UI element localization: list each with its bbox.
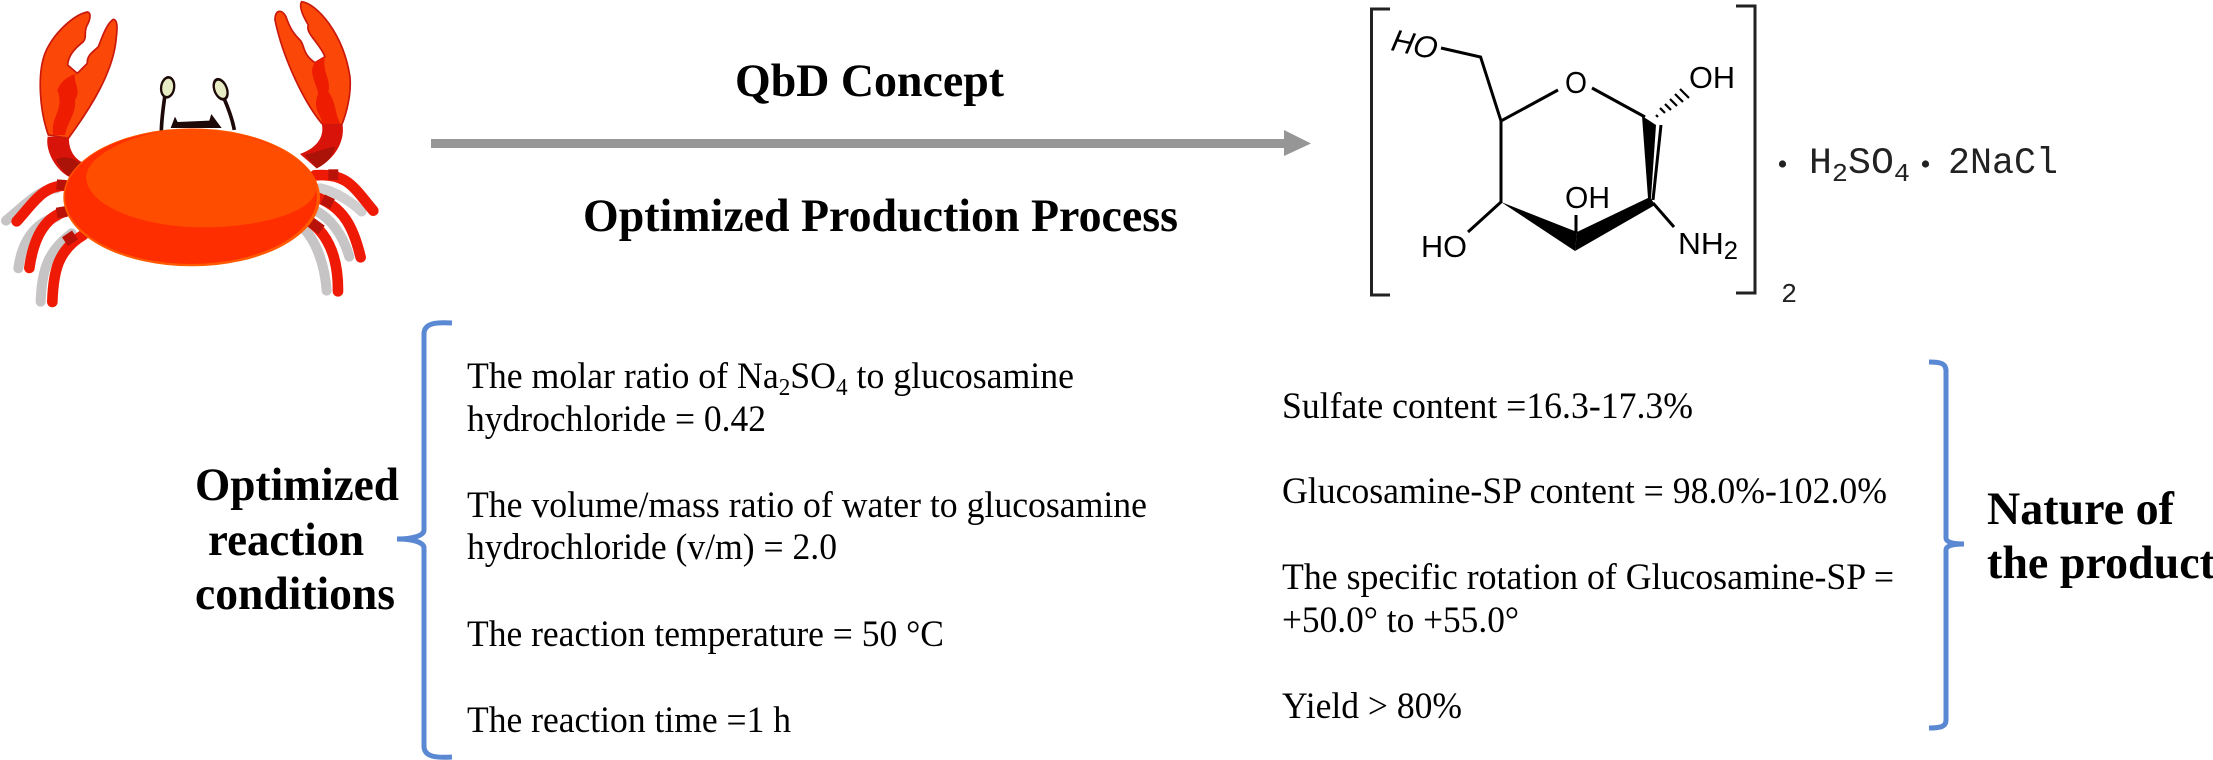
hashed bond (1656, 89, 1689, 117)
crab left claw (40, 12, 117, 138)
crab right eye centre (213, 79, 229, 100)
volume mass ratio value: hydrochloride (v/m) = 2.0 (467, 527, 837, 568)
second dot (1922, 160, 1929, 168)
crab right claw ridge (312, 57, 341, 124)
heading: Optimized Production Process: Optimized Production Process (583, 190, 1178, 242)
crab left claw ridge (53, 74, 78, 135)
formula H2SO4: SO (1848, 143, 1894, 185)
label HO bottom: HO (1421, 229, 1467, 264)
label ring O: O (1565, 65, 1587, 100)
wedge bond bottom left (1501, 202, 1577, 251)
molar ratio: SO (790, 356, 836, 397)
yield: Yield > 80% (1282, 686, 1462, 727)
heading: QbD Concept: QbD Concept (735, 55, 1004, 107)
molar ratio value: hydrochloride = 0.42 (467, 399, 766, 440)
label line conditions: conditions (195, 568, 395, 620)
specific rotation: The specific rotation of Glucosamine-SP = (1282, 557, 1894, 598)
crab right eye (209, 75, 232, 103)
salt formula (1779, 143, 2058, 189)
crab right claw (275, 2, 350, 125)
crab right arm (300, 123, 343, 168)
molar ratio: to glucosamine (848, 356, 1074, 397)
icon: crab (6, 2, 373, 302)
label NH2: NH (1678, 226, 1723, 261)
label line reaction: reaction (208, 514, 364, 566)
left curly bracket (397, 323, 452, 757)
molar ratio: The molar ratio of Na (467, 356, 790, 397)
volume mass ratio: The volume/mass ratio of water to glucosamine (467, 485, 1147, 526)
crab leg shadows (6, 188, 362, 302)
time: The reaction time =1 h (467, 700, 791, 741)
wedge bond right (1642, 116, 1656, 198)
crab leg joints (57, 175, 338, 242)
right curly bracket (1929, 362, 1964, 728)
text block: reaction conditions (467, 356, 1147, 741)
crab body lower shell (65, 129, 317, 264)
left square bracket (1372, 9, 1390, 295)
temperature: The reaction temperature = 50 °C (467, 614, 944, 655)
crab legs (17, 175, 373, 302)
crab mouth (171, 114, 222, 128)
ring bonds (1441, 48, 1674, 233)
crab left arm (47, 137, 85, 177)
first dot (1779, 160, 1786, 168)
wedge bond bottom right (1575, 197, 1655, 251)
formula H2SO4: H (1809, 143, 1831, 185)
label OH top right: OH (1689, 60, 1735, 95)
crab left eye (158, 75, 177, 100)
chemical structure: glucosamine sulfate (1372, 6, 2058, 311)
specific rotation value: +50.0° to +55.0° (1282, 600, 1519, 641)
molar ratio: 4 (836, 375, 848, 401)
label line the product: the product (1987, 537, 2213, 589)
right square bracket (1736, 6, 1755, 293)
formula 2NaCl: 2NaCl (1948, 143, 2058, 185)
heading: Optimized reaction conditions (195, 459, 399, 620)
crab left eye centre (161, 78, 174, 97)
glucosamine content: Glucosamine-SP content = 98.0%-102.0% (1282, 471, 1887, 512)
crab body upper shell (86, 129, 317, 227)
text block: product properties (1282, 386, 1894, 727)
heading: Nature of the product (1987, 483, 2213, 589)
label OH centre: OH (1565, 180, 1610, 215)
crab body rim (63, 128, 320, 266)
label HO top: HO (1389, 23, 1441, 66)
crab eye stalks (161, 95, 234, 133)
label NH2: 2 (1724, 237, 1738, 265)
formula H2SO4: 4 (1894, 159, 1910, 189)
arrow (431, 130, 1311, 156)
label line Nature of: Nature of (1987, 483, 2175, 535)
label line Optimized: Optimized (195, 459, 399, 511)
sulfate content: Sulfate content =16.3-17.3% (1282, 386, 1693, 427)
bracket subscript 2: 2 (1781, 281, 1797, 311)
molar ratio: 2 (779, 375, 790, 401)
formula H2SO4: 2 (1832, 159, 1848, 189)
